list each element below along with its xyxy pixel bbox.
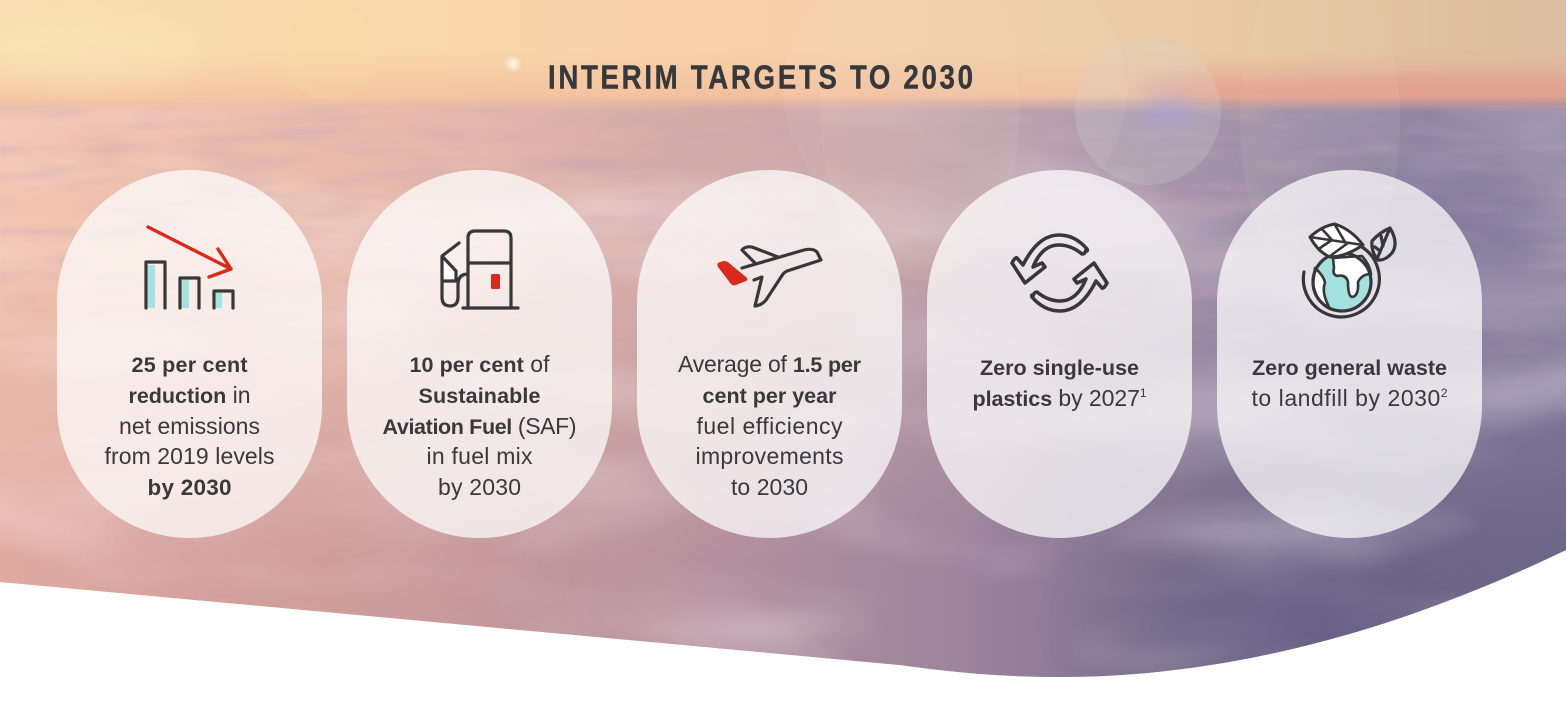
panel: single-use plastics target: [927, 170, 1192, 538]
text: efficiency target: to 2030: [731, 474, 808, 500]
text: efficiency target: fuel efficiency: [696, 413, 843, 439]
text: waste target: Zero general waste: [1252, 356, 1447, 380]
text: net emissions target: by 2030: [148, 475, 232, 500]
text: plastics target: [972, 356, 1147, 411]
text: efficiency target: cent per year: [702, 384, 837, 408]
text: efficiency target: [678, 351, 862, 500]
text: waste target: [1252, 356, 1448, 411]
text: net emissions target: reduction in: [128, 382, 250, 408]
icon: circular recycling arrows: [1012, 235, 1107, 311]
text: net emissions target: net emissions: [119, 413, 260, 439]
text: efficiency target: improvements: [696, 443, 844, 469]
text: waste target: to landfill by 2030: [1252, 385, 1440, 411]
text: fuel target: in fuel mix: [426, 443, 533, 469]
panel: sustainable aviation fuel target: [347, 170, 612, 538]
text: fuel target: [382, 351, 576, 500]
text: net emissions target: 25 per cent: [132, 353, 248, 377]
text: waste target: 2: [1441, 386, 1448, 400]
icon: globe with leaves: [1303, 224, 1395, 317]
text: net emissions target: from 2019 levels: [104, 443, 274, 469]
icon: aeroplane: [717, 247, 821, 306]
text: efficiency target: Average of 1.5 per: [678, 351, 862, 377]
text: fuel target: Aviation Fuel (SAF): [382, 413, 576, 439]
panel: net emissions target: [57, 170, 322, 538]
icon: fuel pump: [442, 231, 518, 308]
icon: falling bars with red arrow: [146, 227, 233, 308]
panel: fuel efficiency target: [637, 170, 902, 538]
text: fuel target: 10 per cent of: [410, 351, 550, 377]
text: plastics target: Zero single-use: [980, 356, 1139, 380]
title: INTERIM TARGETS TO 2030: [548, 59, 973, 96]
text: plastics target: 1: [1140, 386, 1147, 400]
panel: general waste target: [1217, 170, 1482, 538]
text: fuel target: by 2030: [438, 474, 521, 500]
text: net emissions target: [104, 353, 274, 500]
text: plastics target: plastics by 2027: [972, 385, 1140, 411]
text: fuel target: Sustainable: [418, 384, 541, 408]
